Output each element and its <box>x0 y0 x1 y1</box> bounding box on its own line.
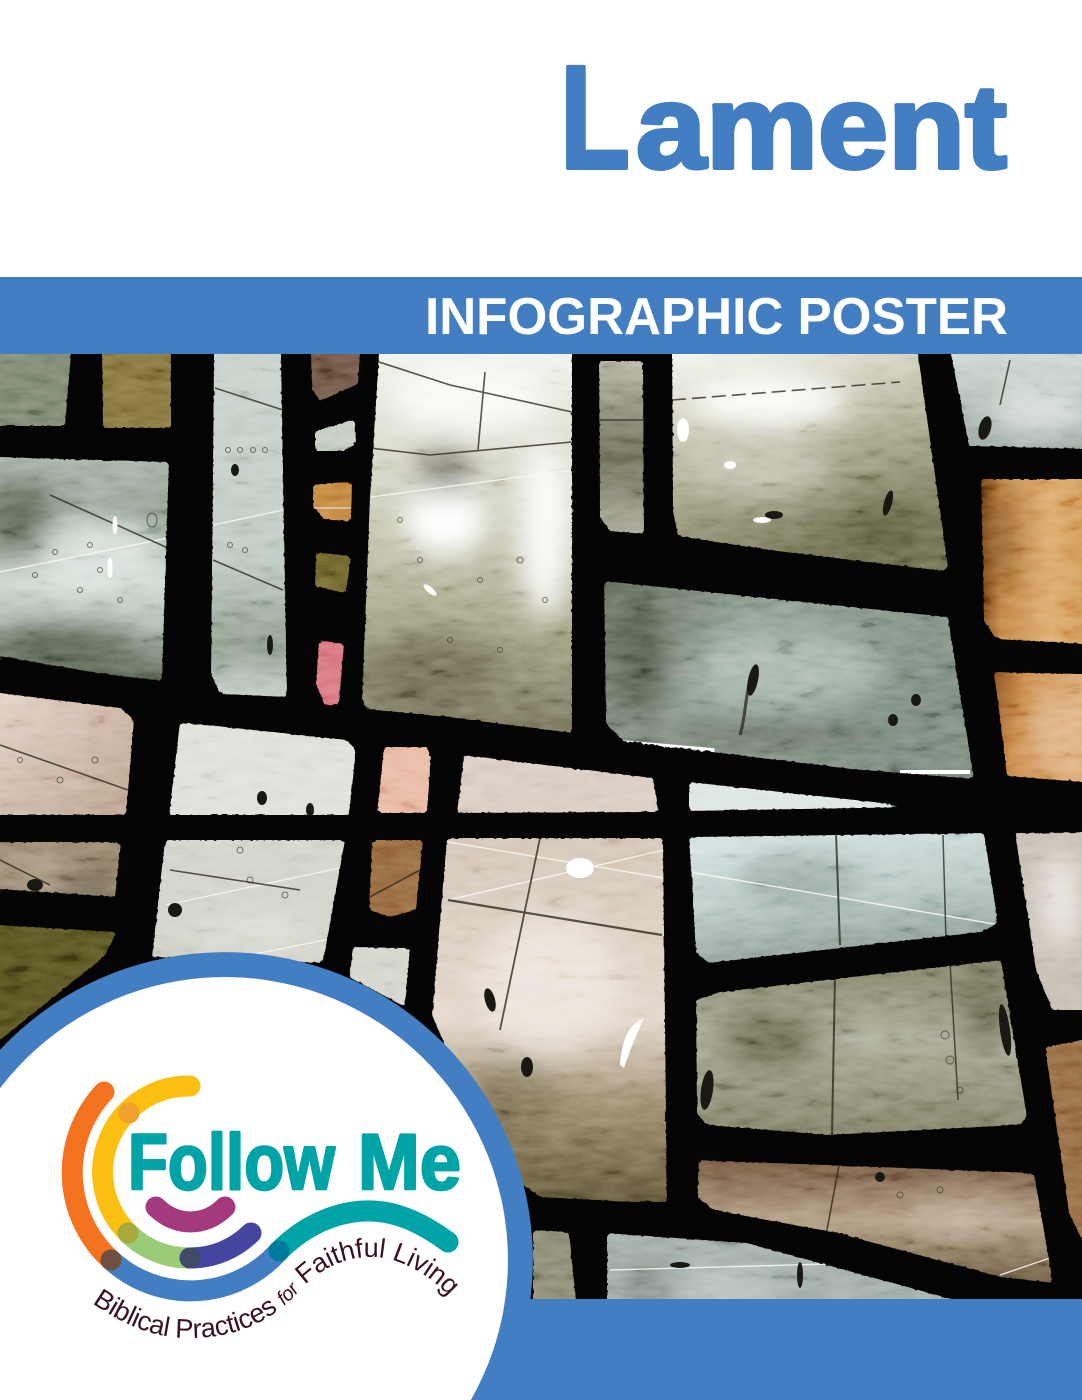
logo arc: green <box>128 1233 190 1258</box>
blue circle ring <box>0 952 533 1400</box>
logo arc: indigo <box>190 1233 251 1258</box>
subtitle: Infographic Poster: INFOGRAPHIC POSTER <box>425 288 1008 346</box>
logo wave: teal <box>279 1211 448 1251</box>
logo: Follow Me <box>62 1076 461 1338</box>
photo: stained glass window <box>0 354 1082 1320</box>
glass streak texture <box>0 354 1082 1300</box>
logo wordmark: Me <box>358 1117 461 1206</box>
footer band <box>0 1299 1082 1400</box>
header band <box>0 277 1082 355</box>
title: Lament: ament <box>636 61 1007 194</box>
logo wave: blue <box>111 1251 279 1291</box>
overlap dots <box>100 1102 290 1270</box>
white circle badge <box>0 977 508 1400</box>
logo smile: purple <box>156 1207 225 1222</box>
scratches and bubbles <box>0 360 1050 1288</box>
logo tagline: Biblical Practices for Faithful Living <box>94 1238 458 1338</box>
glass light and shadow blotches <box>0 366 1082 1320</box>
logo wordmark: Follow <box>128 1117 335 1206</box>
logo arc: yellow <box>103 1086 190 1233</box>
title: Lament: L <box>560 36 630 200</box>
logo arc: orange <box>72 1092 111 1260</box>
lead came framework <box>0 354 1082 1300</box>
glass panes <box>0 354 1082 1300</box>
